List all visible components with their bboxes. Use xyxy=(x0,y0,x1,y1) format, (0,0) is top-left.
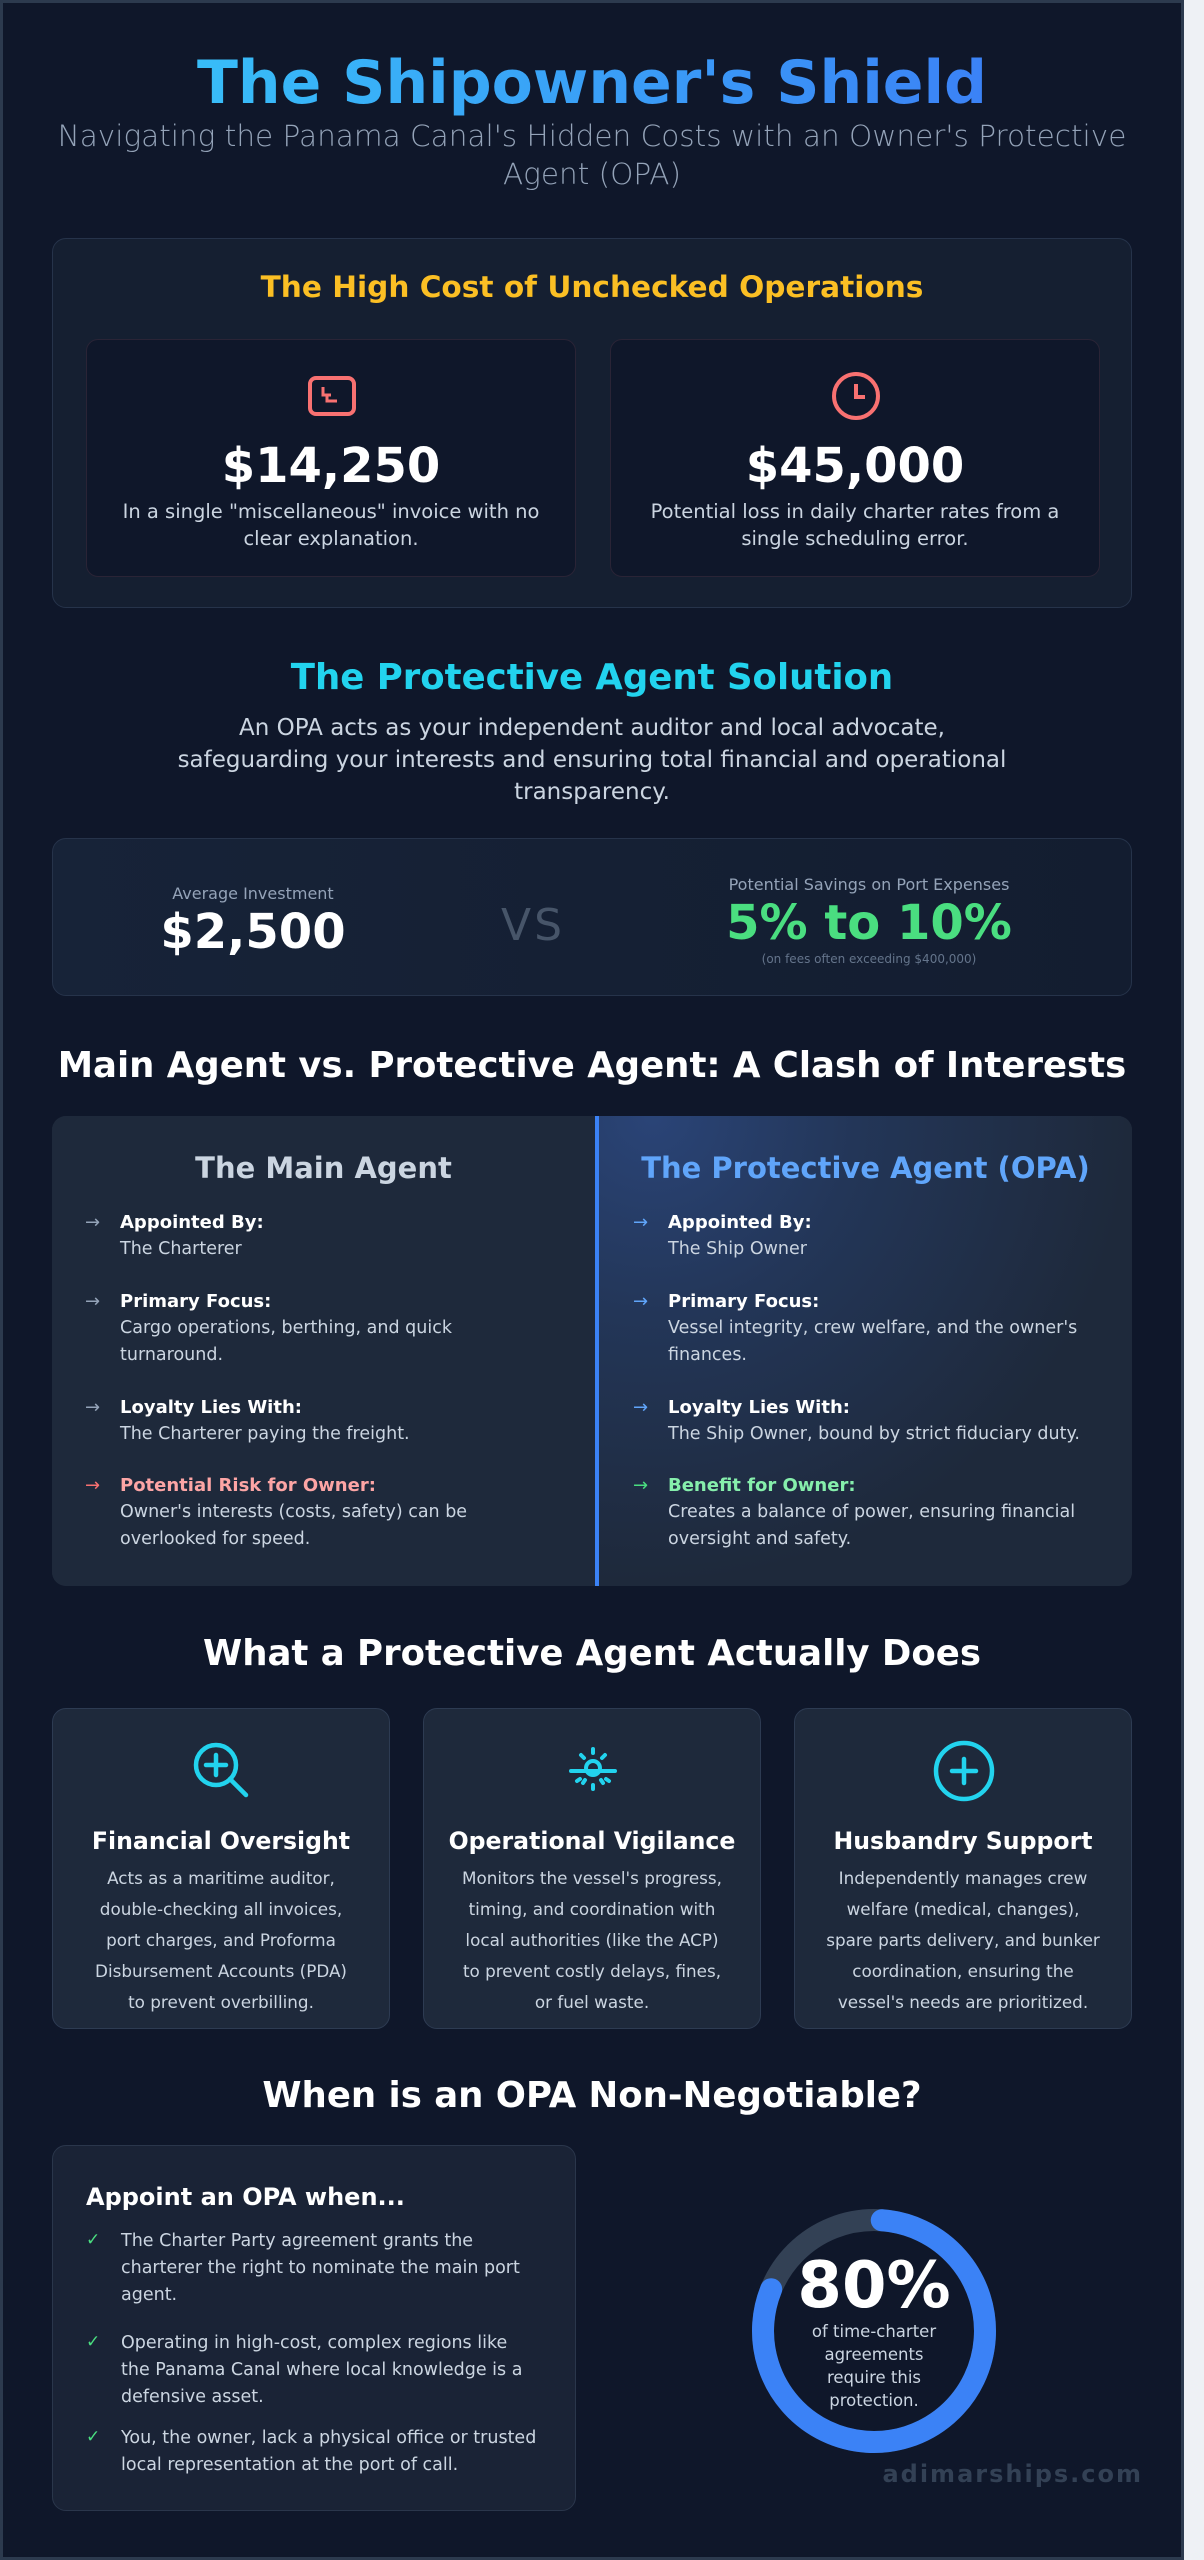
column: main agent: Primary Focus: xyxy=(120,1291,271,1312)
card: operational vigilance: timing, and coordination with xyxy=(469,1899,715,1919)
column: protective agent: → xyxy=(633,1397,648,1418)
heading: high cost: The High Cost of Unchecked Operations xyxy=(261,270,923,304)
card: husbandry support: vessel's needs are prioritized. xyxy=(838,1992,1088,2012)
donut label: require this xyxy=(827,2368,921,2387)
column: main agent: The Charterer paying the freight. xyxy=(120,1424,410,1444)
column: main agent: The Charterer xyxy=(120,1239,242,1259)
card: operational vigilance: Monitors the vessel's progress, xyxy=(462,1868,722,1888)
column: main agent: Potential Risk for Owner: xyxy=(120,1475,376,1496)
card: financial oversight xyxy=(52,1708,390,2029)
savings: (on fees often exceeding $400,000) xyxy=(762,952,976,966)
text: solution xyxy=(178,715,1006,805)
subtitle xyxy=(58,119,1126,191)
card: financial oversight: to prevent overbilling. xyxy=(128,1992,314,2012)
card: husbandry support: welfare (medical, changes), xyxy=(847,1899,1079,1919)
description: single scheduling error. xyxy=(741,527,969,550)
column: protective agent: The Ship Owner, bound by strict fiduciary duty. xyxy=(668,1424,1080,1444)
donut label: protection. xyxy=(829,2391,919,2410)
column: protective agent: oversight and safety. xyxy=(668,1529,851,1549)
column: main agent xyxy=(52,1116,595,1586)
heading: what OPA does: What a Protective Agent Actually Does xyxy=(203,1633,981,1674)
card: husbandry support: Husbandry Support xyxy=(833,1827,1092,1855)
panel: investment vs savings xyxy=(52,838,1132,996)
subtitle: Navigating the Panama Canal's Hidden Costs with an Owner's Protective xyxy=(58,119,1126,153)
savings: 5% to 10% xyxy=(726,895,1012,951)
column: protective agent: Loyalty Lies With: xyxy=(668,1397,850,1418)
column: main agent: → xyxy=(85,1397,100,1418)
panel: appoint when: ✓ xyxy=(86,2230,100,2250)
panel: appoint when: defensive asset. xyxy=(121,2387,264,2407)
column: protective agent: Appointed By: xyxy=(668,1212,812,1233)
savings: Potential Savings on Port Expenses xyxy=(729,875,1009,894)
column: main agent: Loyalty Lies With: xyxy=(120,1397,302,1418)
heading: non-negotiable: When is an OPA Non-Negotiable? xyxy=(262,2075,922,2116)
column: protective agent: → xyxy=(633,1291,648,1312)
panel: high cost xyxy=(52,238,1132,608)
heading: solution: The Protective Agent Solution xyxy=(291,657,893,698)
vs: VS xyxy=(501,900,565,951)
icon: clock xyxy=(832,372,880,420)
heading: main agent: The Main Agent xyxy=(195,1151,452,1185)
column: protective agent xyxy=(595,1116,1132,1586)
card: operational vigilance: or fuel waste. xyxy=(535,1992,649,2012)
card: charter loss xyxy=(610,339,1100,577)
column: main agent: Cargo operations, berthing, and quick xyxy=(120,1318,452,1338)
column: main agent: → xyxy=(85,1475,100,1496)
icon: circle plus xyxy=(934,1740,994,1802)
description: clear explanation. xyxy=(243,527,419,550)
card: operational vigilance: Operational Vigilance xyxy=(449,1827,735,1855)
donut label: 80% xyxy=(797,2249,951,2323)
donut label: agreements xyxy=(824,2345,924,2364)
donut label xyxy=(797,2249,951,2410)
column: main agent: turnaround. xyxy=(120,1345,223,1365)
value: $45,000 xyxy=(746,438,964,494)
text: solution: safeguarding your interests and ensuring total financial and operational xyxy=(178,747,1006,773)
text: solution: An OPA acts as your independent auditor and local advocate, xyxy=(239,715,945,741)
title: The Shipowner's Shield xyxy=(197,48,987,118)
card: invoice xyxy=(86,339,576,577)
column: main agent: → xyxy=(85,1212,100,1233)
column: main agent: overlooked for speed. xyxy=(120,1529,310,1549)
column: protective agent: Vessel integrity, crew welfare, and the owner's xyxy=(668,1318,1077,1338)
panel: appoint when: ✓ xyxy=(86,2427,100,2447)
column: main agent: Appointed By: xyxy=(120,1212,264,1233)
card: financial oversight: double-checking all invoices, xyxy=(100,1899,342,1919)
card: operational vigilance xyxy=(423,1708,761,2029)
chart: 80% donut xyxy=(752,2209,996,2453)
subtitle: Agent (OPA) xyxy=(503,157,681,191)
text: solution: transparency. xyxy=(514,779,670,805)
column: protective agent: finances. xyxy=(668,1345,747,1365)
card: financial oversight: port charges, and Proforma xyxy=(106,1930,336,1950)
column: protective agent: The Ship Owner xyxy=(668,1239,807,1259)
investment: $2,500 xyxy=(160,904,346,960)
panel: appoint when: local representation at the port of call. xyxy=(121,2455,458,2475)
donut label: of time-charter xyxy=(812,2322,936,2341)
card: operational vigilance: local authorities (like the ACP) xyxy=(465,1930,719,1950)
icon: magnifier plus xyxy=(194,1742,248,1798)
icon: vigilance xyxy=(569,1747,617,1791)
savings xyxy=(726,875,1012,966)
description: In a single "miscellaneous" invoice with no xyxy=(123,500,539,523)
panel: appoint when: The Charter Party agreement grants the xyxy=(121,2231,473,2251)
panel: comparison xyxy=(52,1116,1132,1586)
heading: appoint: Appoint an OPA when... xyxy=(86,2183,405,2211)
panel: appoint when xyxy=(52,2145,576,2511)
card: financial oversight: Disbursement Accounts (PDA) xyxy=(95,1961,347,1981)
column: main agent: → xyxy=(85,1291,100,1312)
column: protective agent: Creates a balance of power, ensuring financial xyxy=(668,1502,1075,1522)
heading: OPA: The Protective Agent (OPA) xyxy=(641,1151,1090,1185)
panel: appoint when: You, the owner, lack a physical office or trusted xyxy=(121,2428,536,2448)
description xyxy=(123,500,539,550)
icon: invoice xyxy=(308,376,356,416)
heading: comparison: Main Agent vs. Protective Agent: A Clash of Interests xyxy=(58,1045,1126,1086)
investment: Average Investment xyxy=(172,884,334,903)
value: $14,250 xyxy=(222,438,440,494)
description xyxy=(651,500,1059,550)
description: Potential loss in daily charter rates from a xyxy=(651,500,1059,523)
panel: appoint when: charterer the right to nominate the main port xyxy=(121,2258,520,2278)
card: financial oversight: Acts as a maritime auditor, xyxy=(107,1868,335,1888)
panel: appoint when: the Panama Canal where local knowledge is a xyxy=(121,2360,522,2380)
column: protective agent: → xyxy=(633,1212,648,1233)
card: husbandry support: coordination, ensuring the xyxy=(852,1961,1074,1981)
card: husbandry support: Independently manages crew xyxy=(839,1868,1087,1888)
card: husbandry support: spare parts delivery, and bunker xyxy=(826,1930,1100,1950)
card: husbandry support xyxy=(794,1708,1132,2029)
watermark: adimarships.com xyxy=(882,2460,1143,2488)
column: protective agent: Benefit for Owner: xyxy=(668,1475,856,1496)
column: protective agent: Primary Focus: xyxy=(668,1291,819,1312)
panel: appoint when: Operating in high-cost, complex regions like xyxy=(121,2333,507,2353)
card: operational vigilance: to prevent costly delays, fines, xyxy=(463,1961,721,1981)
card: financial oversight: Financial Oversight xyxy=(92,1827,350,1855)
column: protective agent: → xyxy=(633,1475,648,1496)
column: main agent: Owner's interests (costs, safety) can be xyxy=(120,1502,467,1522)
panel: appoint when: agent. xyxy=(121,2285,177,2305)
panel: appoint when: ✓ xyxy=(86,2332,100,2352)
